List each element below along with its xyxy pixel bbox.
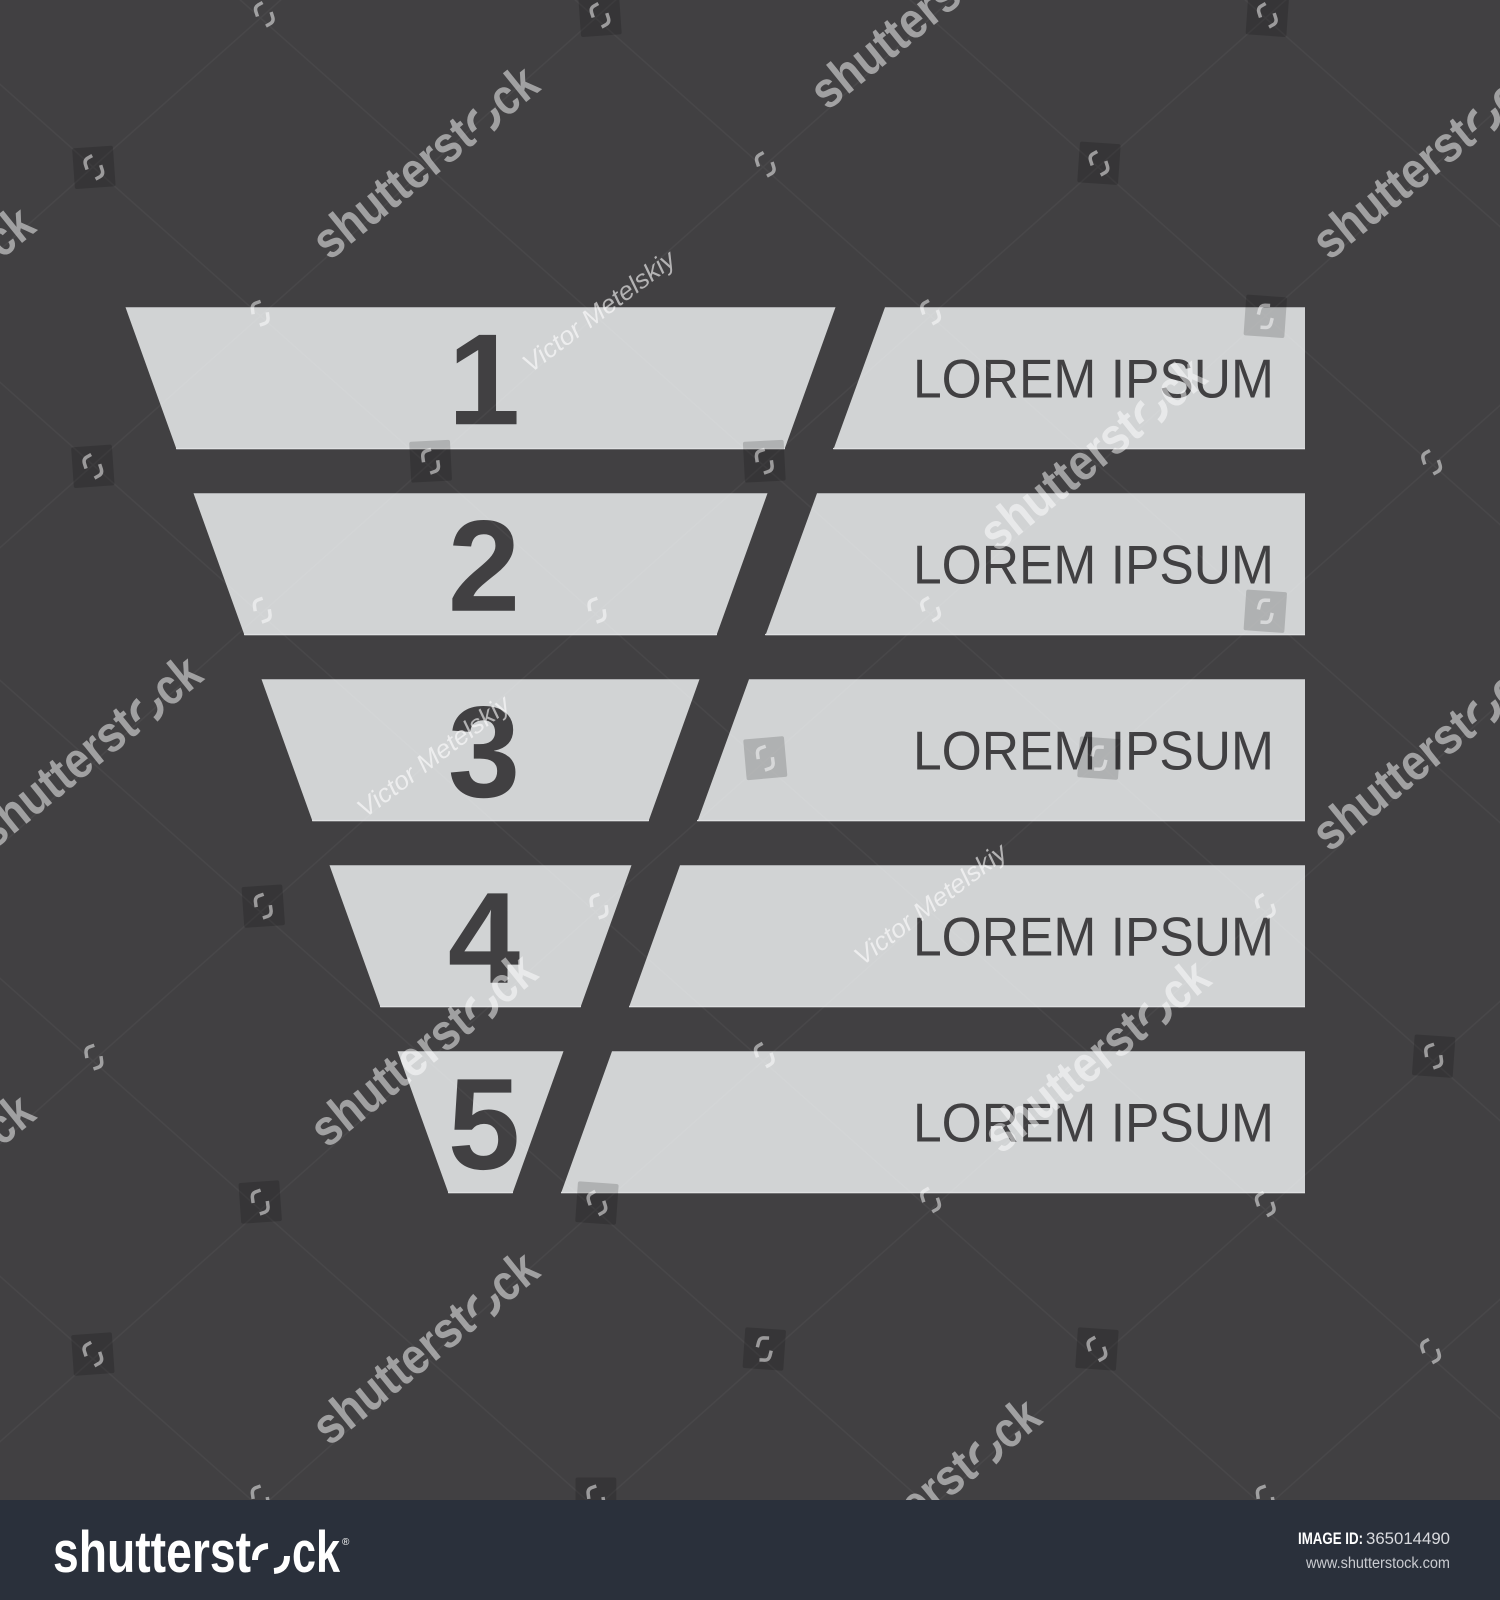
shutterstock diagonal watermarks: ck <box>140 643 213 717</box>
contributor watermarks: Victor Metelskiy <box>849 837 1014 971</box>
label 4: LOREM IPSUM <box>913 905 1274 967</box>
label panel 1 <box>834 307 1305 449</box>
shutterstock diagonal watermarks: ck <box>475 941 547 1015</box>
contributor watermarks <box>352 244 1014 971</box>
stage 1 trapezoid <box>126 307 836 449</box>
number 3: 3 <box>448 679 520 825</box>
number 4: 4 <box>448 865 520 1011</box>
shutterstock diagonal watermarks: shutterst <box>972 999 1156 1164</box>
contributor watermarks: Victor Metelskiy <box>517 244 683 378</box>
panel bottom highlights <box>176 448 1305 1192</box>
shutterstock diagonal watermarks: shutterst <box>301 105 485 270</box>
shutterstock diagonal watermarks: ck <box>477 1239 549 1313</box>
label 3: LOREM IPSUM <box>913 719 1274 781</box>
label panel 2 <box>766 493 1305 635</box>
funnel: numbered stages <box>126 307 836 1193</box>
stage 2 trapezoid <box>194 493 768 635</box>
shutterstock diagonal watermarks: shutterst <box>301 1291 485 1455</box>
stage numbers <box>448 306 520 1197</box>
shutterstock diagonal watermarks: shutterst <box>968 397 1152 562</box>
label panel 4 <box>629 865 1305 1007</box>
panel labels <box>913 347 1274 1153</box>
label panel 5 <box>561 1051 1305 1193</box>
label 2: LOREM IPSUM <box>913 533 1274 595</box>
shutterstock diagonal watermarks: shutterst <box>803 1438 987 1600</box>
shutterstock diagonal watermarks: ck <box>477 53 549 127</box>
footer logo: ck <box>292 1520 341 1585</box>
label panel 3 <box>698 679 1305 821</box>
image id: IMAGE ID: <box>1298 1529 1363 1548</box>
stage 4 trapezoid <box>330 865 632 1007</box>
image id: 365014490 <box>1366 1529 1450 1548</box>
shutterstock diagonal watermarks: ck <box>1148 947 1221 1021</box>
footer logo: ® <box>342 1537 350 1548</box>
footer url: www.shutterstock.com <box>1305 1555 1450 1572</box>
label panels <box>561 307 1305 1193</box>
shutterstock diagonal watermarks: shutterst <box>299 993 483 1158</box>
shutterstock diagonal watermarks: shutterst <box>1301 105 1485 270</box>
contributor watermarks: Victor Metelskiy <box>352 689 517 823</box>
stage 5 trapezoid <box>398 1051 564 1193</box>
shutterstock diagonal watermarks: shutterst <box>1301 697 1485 862</box>
image id <box>1298 1529 1450 1548</box>
label 5: LOREM IPSUM <box>913 1091 1274 1153</box>
shutterstock diagonal watermarks: ck <box>1144 345 1217 419</box>
number 5: 5 <box>448 1051 520 1197</box>
footer logo: shutterst <box>53 1520 251 1585</box>
number 2: 2 <box>448 493 520 639</box>
label 1: LOREM IPSUM <box>913 347 1274 409</box>
shutterstock diagonal watermarks: ck <box>979 1386 1051 1460</box>
stage 3 trapezoid <box>262 679 700 821</box>
footer bar <box>0 1500 1500 1600</box>
number 1: 1 <box>448 306 520 452</box>
